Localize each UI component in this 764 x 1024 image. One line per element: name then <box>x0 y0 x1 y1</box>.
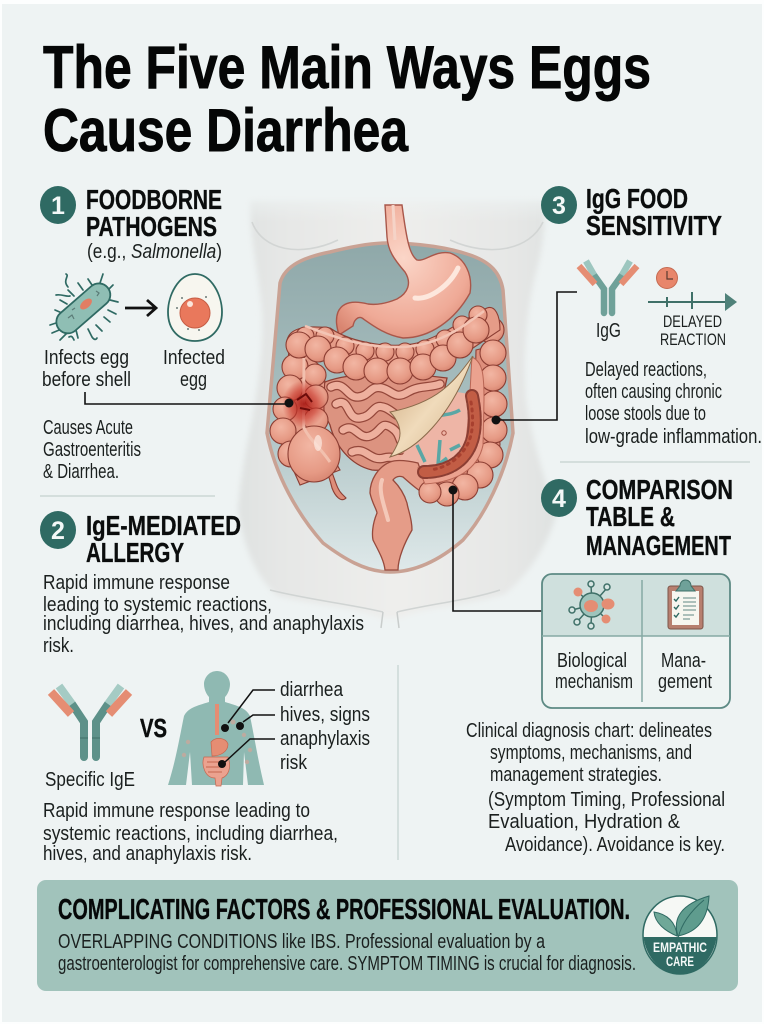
badge 4 <box>541 479 577 517</box>
arrow <box>125 300 156 316</box>
labels: egg infection <box>42 347 225 391</box>
labels: table cells: gement <box>658 671 712 693</box>
small intestine <box>322 374 447 470</box>
label: delayed reaction <box>660 313 726 349</box>
text: rapid immune response <box>43 572 364 657</box>
text: causes <box>43 417 141 483</box>
text: rapid immune response: risk. <box>43 635 74 657</box>
badge 1: 1 <box>51 192 65 220</box>
icon: clipboard <box>668 580 703 629</box>
icon: clock and timeline arrow <box>648 268 737 311</box>
icon: biological mechanism <box>569 581 614 629</box>
banner: complicating factors <box>37 880 738 991</box>
badge 4: 4 <box>552 485 566 513</box>
text: delayed reactions: loose stools due to <box>585 403 706 425</box>
text: immune summary: hives, and anaphylaxis risk. <box>43 843 252 865</box>
title: Cause Diarrhea <box>43 97 409 164</box>
heading: IgE-mediated allergy: ALLERGY <box>86 537 184 568</box>
esophagus and stomach <box>336 205 471 338</box>
heading: IgG food sensitivity: IgG FOOD <box>586 183 688 214</box>
text: clinical diagnosis chart: Avoidance). Avoidance is key. <box>505 834 725 856</box>
colon: transverse segment <box>286 306 500 384</box>
text: rapid immune response: including diarrhea, hives, and anaphylaxis <box>43 613 364 635</box>
badge 3: 3 <box>552 192 566 220</box>
text: clinical diagnosis chart: management strategies. <box>490 764 662 786</box>
colon: ascending segment and cecum <box>270 340 346 500</box>
panel: IgG food sensitivity <box>541 183 762 448</box>
icon: infected egg <box>168 274 222 341</box>
heading: comparison table and management <box>586 474 733 561</box>
text: clinical diagnosis chart: Clinical diagnosis chart: delineates <box>466 720 712 742</box>
heading: IgE-mediated allergy: IgE-MEDIATED <box>86 510 241 541</box>
connector: IgG to colon <box>492 292 577 424</box>
text: clinical diagnosis chart: (Symptom Timing, Professional <box>488 789 725 811</box>
text: immune summary: systemic reactions, including diarrhea, <box>43 823 338 845</box>
label: delayed reaction: REACTION <box>660 331 726 349</box>
heading: IgE-mediated allergy <box>86 510 241 568</box>
labels: egg infection: Infected <box>163 347 225 369</box>
text: rapid immune response: leading to systemic reactions, <box>43 594 272 616</box>
icon: IgE antibody <box>51 686 129 757</box>
abdominal cavity <box>267 243 513 572</box>
text: delayed reactions: Delayed reactions, <box>585 359 707 381</box>
labels: table cells <box>555 650 712 693</box>
icon: IgG antibody <box>579 261 637 313</box>
vs label: VS <box>140 713 167 743</box>
text: delayed reactions <box>585 359 762 448</box>
labels: symptoms: diarrhea <box>280 679 344 701</box>
peeled tissue flap <box>390 356 473 457</box>
connector: colon to table <box>448 486 542 611</box>
text: clinical diagnosis chart <box>466 720 725 856</box>
emblem: empathic care: EMPATHIC <box>653 940 707 955</box>
badge 3 <box>541 186 577 224</box>
colon lumen with inflammation <box>424 396 475 472</box>
labels: table cells: Mana- <box>661 650 706 672</box>
subheading: (e.g., Salmonella) <box>87 241 222 263</box>
heading: IgG food sensitivity <box>586 183 722 241</box>
icon: bacterium <box>50 274 118 340</box>
title: The Five Main Ways Eggs <box>43 34 651 101</box>
text: clinical diagnosis chart: symptoms, mechanisms, and <box>490 742 692 764</box>
connector: pathogen to cecum <box>85 392 294 408</box>
labels: symptoms: anaphylaxis <box>280 728 370 750</box>
heading: foodborne pathogens <box>86 184 222 242</box>
exposed tissue under flap <box>398 390 475 472</box>
text: causes: & Diarrhea. <box>43 461 119 483</box>
panel: foodborne pathogens <box>40 184 225 483</box>
badge 2: 2 <box>51 517 65 545</box>
label: delayed reaction: DELAYED <box>663 313 722 331</box>
panel: IgE-mediated allergy <box>40 510 370 865</box>
labels: symptoms <box>280 679 370 774</box>
badge 2 <box>40 511 76 549</box>
text: immune summary: Rapid immune response leading to <box>43 800 310 822</box>
text: causes: Causes Acute <box>43 417 133 439</box>
labels: symptoms: risk <box>280 752 308 774</box>
banner body text <box>58 931 636 975</box>
labels: egg infection: before shell <box>42 369 131 391</box>
text: immune summary <box>43 800 338 865</box>
banner body text: OVERLAPPING CONDITIONS like IBS. Professional evaluation by a <box>58 931 546 953</box>
icon: human figure with symptoms <box>168 671 275 786</box>
labels: egg infection: Infects egg <box>44 347 129 369</box>
comparison card <box>542 574 730 708</box>
label: IgG: IgG <box>596 320 621 342</box>
torso silhouette <box>238 200 556 618</box>
text: rapid immune response: Rapid immune response <box>43 572 230 594</box>
emblem: empathic care <box>643 896 717 974</box>
emblem: empathic care: CARE <box>666 954 694 969</box>
text: causes: Gastroenteritis <box>43 439 141 461</box>
title <box>43 34 651 164</box>
colon: descending segment <box>418 317 507 506</box>
heading: comparison table and management: TABLE & <box>586 501 675 532</box>
heading: foodborne pathogens: PATHOGENS <box>86 211 217 242</box>
labels: table cells: mechanism <box>555 671 633 693</box>
labels: table cells: Biological <box>557 650 627 672</box>
heading: foodborne pathogens: FOODBORNE <box>86 184 222 215</box>
labels: egg infection: egg <box>180 369 207 391</box>
panel: comparison table and management <box>466 474 733 856</box>
heading: IgG food sensitivity: SENSITIVITY <box>586 210 722 241</box>
colon: rectum and sigmoid <box>370 461 430 570</box>
anatomy illustration: torso and digestive system <box>225 190 570 628</box>
labels: symptoms: hives, signs <box>280 704 370 726</box>
text: clinical diagnosis chart: Evaluation, Hydration & <box>488 811 681 833</box>
label: specific IgE: Specific IgE <box>45 769 135 791</box>
inflammation spot <box>282 380 326 428</box>
badge 1 <box>40 186 76 224</box>
